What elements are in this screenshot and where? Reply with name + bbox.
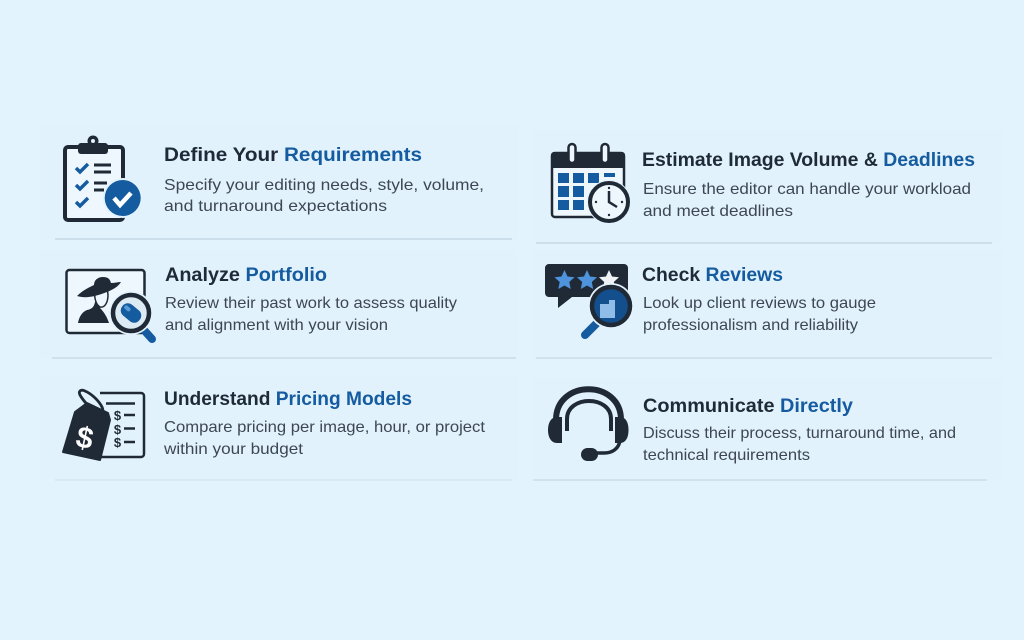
heading: Estimate Image Volume & Deadlines xyxy=(642,150,975,171)
panel: estimate image volume and deadlines: and meet deadlines xyxy=(643,203,793,220)
panel: check reviews xyxy=(532,250,1002,358)
panel: communicate directly xyxy=(532,378,1002,480)
text block: Compare pricing per image, hour, or project xyxy=(164,419,486,436)
panel: understand pricing models xyxy=(40,375,518,480)
heading: Understand Pricing Models xyxy=(164,389,412,410)
panel: understand pricing models: within your budget xyxy=(163,441,304,458)
icon: calendar with clock xyxy=(551,144,631,224)
panel: define your requirements: and turnaround expectations xyxy=(164,198,387,215)
panel: estimate image volume and deadlines xyxy=(532,130,1002,243)
panel: communicate directly: technical requirements xyxy=(643,447,810,464)
heading: Communicate Directly xyxy=(643,396,853,417)
text block: Review their past work to assess quality xyxy=(165,295,457,312)
panel: check reviews: professionalism and reliability xyxy=(643,317,858,334)
text block: Specify your editing needs, style, volume, xyxy=(164,177,484,194)
icon: price tag and list: $ xyxy=(73,421,97,456)
text block: Discuss their process, turnaround time, and xyxy=(643,425,956,442)
heading: Check Reviews xyxy=(642,265,783,286)
icon: price tag and list: $ xyxy=(114,408,122,423)
panel: analyze portfolio xyxy=(40,250,518,358)
icon: portrait under magnifier xyxy=(66,270,153,339)
heading: Analyze Portfolio xyxy=(165,265,327,286)
icon: price tag and list xyxy=(63,390,144,460)
icon: price tag and list: $ xyxy=(114,422,122,437)
text block: Ensure the editor can handle your workload xyxy=(643,181,971,198)
heading: Define Your Requirements xyxy=(164,145,422,166)
panel: define your requirements xyxy=(40,125,518,239)
panel: analyze portfolio: and alignment with your vision xyxy=(165,317,388,334)
icon: review bubble with magnifier xyxy=(545,264,634,335)
icon: headset xyxy=(548,389,628,461)
icon: clipboard checklist xyxy=(65,136,143,220)
icon: price tag and list: $ xyxy=(114,435,122,450)
text block: Look up client reviews to gauge xyxy=(643,295,876,312)
